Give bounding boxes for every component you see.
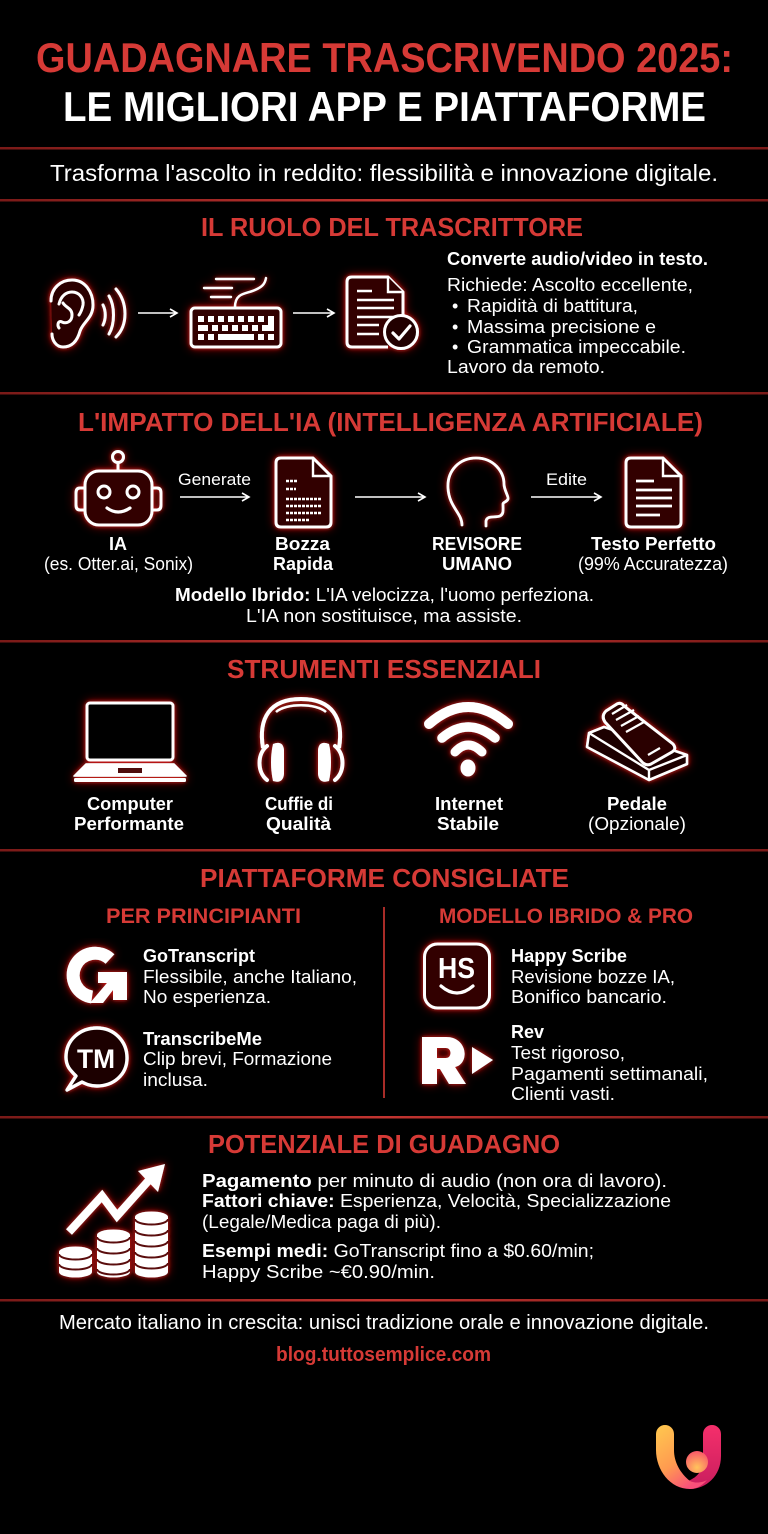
text block: rev: Pagamenti settimanali, [511,1064,708,1084]
label: computer [74,794,184,834]
text block: ruolo: • [452,317,458,337]
text block: modello ibrido [175,585,594,626]
label: internet: Internet [435,794,503,814]
icon: transcribeme logo [66,1028,127,1090]
label: bozza rapida: Rapida [273,554,334,574]
icon: robot [76,452,161,525]
label: cuffie [265,794,333,834]
heading: impatto: L'IMPATTO DELL'IA (INTELLIGENZA ARTIFICIALE) [78,407,703,437]
text block: ruolo: Grammatica impeccabile. [467,337,686,357]
label: cuffie: Cuffie di [265,794,333,814]
text block: ruolo: Lavoro da remoto. [447,357,605,377]
label: testo perfetto: (99% Accuratezza) [578,554,728,574]
label: edite: Edite [546,470,587,489]
text block: ruolo: Massima precisione e [467,317,656,337]
icon: checked document [347,277,418,348]
heading: piattaforme: PIATTAFORME CONSIGLIATE [200,863,569,893]
text block: transcribeme: inclusa. [143,1070,208,1090]
icon: human head [448,458,508,526]
icon: keyboard [191,278,281,347]
icon: laptop [74,703,186,782]
text block: ruolo: Converte audio/video in testo. [447,249,708,269]
arrow: edite [531,493,601,501]
label: bozza rapida [273,534,334,574]
subheading: principianti: PER PRINCIPIANTI [106,905,301,928]
subheading: ibrido e pro: MODELLO IBRIDO & PRO [439,905,693,928]
title: LE MIGLIORI APP E PIATTAFORME [63,83,706,130]
title [36,34,733,130]
label: IA [44,534,193,574]
arrow: ear to keyboard [138,309,177,317]
label: revisore umano: REVISORE [432,534,522,554]
icon: happy scribe logo: HS [438,953,475,985]
text block: rev: Clienti vasti. [511,1084,615,1104]
label: computer: Performante [74,814,184,834]
text block: ruolo: Richiede: Ascolto eccellente, [447,275,693,295]
label: pedale [588,794,686,834]
text block: transcribeme: Clip brevi, Formazione [143,1049,332,1069]
text block: happy scribe: Revisione bozze IA, [511,967,675,987]
arrow: draft to reviewer [355,493,425,501]
text block: ruolo: Rapidità di battitura, [467,296,638,316]
text block: ruolo: • [452,337,458,357]
icon: brand logo [656,1425,721,1489]
text block: transcribeme: TranscribeMe [143,1029,262,1049]
text block: rev: Test rigoroso, [511,1043,625,1063]
arrow: keyboard to document [293,309,334,317]
heading: strumenti: STRUMENTI ESSENZIALI [227,654,541,684]
label: testo perfetto: Testo Perfetto [591,534,716,554]
subtitle: Trasforma l'ascolto in reddito: flessibilità e innovazione digitale. [50,160,718,186]
text block: guadagno details: Happy Scribe ~€0.90/min. [202,1262,435,1282]
heading: ruolo: IL RUOLO DEL TRASCRITTORE [201,212,583,242]
label: revisore umano [432,534,522,574]
label: internet [435,794,503,834]
arrow: generate [180,493,249,501]
text block: ruolo [447,249,708,377]
text block: ruolo: • [452,296,458,316]
text block: gotranscript [143,946,357,1007]
label: IA: IA [109,534,127,554]
icon: draft document [276,458,331,527]
label: revisore umano: UMANO [442,554,512,574]
panel: strumenti essenziali [74,654,687,834]
text block: transcribeme [143,1029,332,1090]
icon: happy scribe logo [424,944,490,1008]
text block: modello ibrido: Modello Ibrido: L'IA velocizza, l'uomo perfeziona. [175,585,594,605]
text block: guadagno details [202,1171,671,1282]
icon: transcribeme logo: TM [77,1044,115,1074]
panel: impatto dell'IA [44,407,728,626]
text block: happy scribe: Bonifico bancario. [511,987,667,1007]
label: IA: (es. Otter.ai, Sonix) [44,554,193,574]
footer link: blog.tuttosemplice.com [276,1344,491,1366]
text block: rev: Rev [511,1022,544,1042]
icon: wifi [429,707,508,776]
text block: gotranscript: No esperienza. [143,987,271,1007]
text block: gotranscript: GoTranscript [143,946,255,966]
panel: potenziale di guadagno [59,1129,671,1282]
icon: ear [51,280,125,347]
text block: modello ibrido: L'IA non sostituisce, ma assiste. [246,606,522,626]
panel: il ruolo del trascrittore [51,212,708,377]
text block: rev [511,1022,708,1104]
label: testo perfetto [578,534,728,574]
label: pedale: Pedale [607,794,667,814]
text block: guadagno details: (Legale/Medica paga di più). [202,1212,441,1232]
icon: rising coins chart [59,1164,168,1278]
text block: gotranscript: Flessibile, anche Italiano, [143,967,357,987]
text block: happy scribe [511,946,675,1007]
icon: headphones [260,699,342,782]
label: pedale: (Opzionale) [588,814,686,834]
panel: piattaforme consigliate [66,863,708,1104]
heading: guadagno: POTENZIALE DI GUADAGNO [208,1129,560,1159]
icon: gotranscript logo [73,953,127,1003]
text block: guadagno details: Esempi medi: GoTranscript fino a $0.60/min; [202,1241,594,1261]
text block: guadagno details: Fattori chiave: Esperienza, Velocità, Specializzazione [202,1191,671,1211]
label: bozza rapida: Bozza [275,534,331,554]
icon: foot pedal [587,703,687,780]
label: generate: Generate [178,470,251,489]
text block: happy scribe: Happy Scribe [511,946,627,966]
icon: final document [626,458,681,527]
label: internet: Stabile [437,814,499,834]
footer text: Mercato italiano in crescita: unisci tradizione orale e innovazione digitale. [59,1312,709,1334]
text block: guadagno details: Pagamento per minuto di audio (non ora di lavoro). [202,1171,667,1191]
icon: rev logo [422,1037,493,1084]
label: computer: Computer [87,794,173,814]
label: cuffie: Qualità [266,814,332,834]
